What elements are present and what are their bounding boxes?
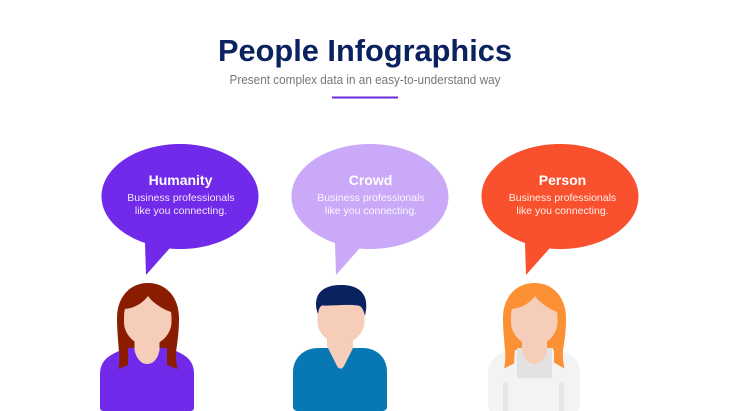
- panel: Humanity: [100, 144, 258, 411]
- speech bubble: Person: [482, 144, 638, 275]
- text: Crowd description: like you connecting.: [325, 205, 417, 217]
- heading: Crowd: Crowd: [349, 172, 392, 188]
- person: man with navy hair: [293, 285, 387, 411]
- subtitle: Present complex data in an easy-to-understand way: [230, 73, 501, 87]
- text: Humanity description: Business professionals: [127, 192, 235, 204]
- panel: Crowd: [292, 144, 448, 411]
- text: Person description: Business professionals: [509, 192, 616, 204]
- heading: Humanity: Humanity: [149, 172, 213, 188]
- title underline: [332, 96, 398, 98]
- person: woman with orange hair: [488, 283, 580, 411]
- text: Person description: like you connecting.: [516, 205, 609, 217]
- speech bubble: Crowd: [292, 144, 448, 275]
- speech bubble: Humanity: [102, 144, 258, 275]
- person: woman with dark red hair: [100, 283, 194, 411]
- heading: Person: Person: [539, 172, 586, 188]
- text: Crowd description: Business professionals: [317, 192, 425, 204]
- title: People Infographics: [218, 33, 512, 68]
- text: Humanity description: like you connecting.: [135, 205, 227, 217]
- panel: Person: [482, 144, 638, 411]
